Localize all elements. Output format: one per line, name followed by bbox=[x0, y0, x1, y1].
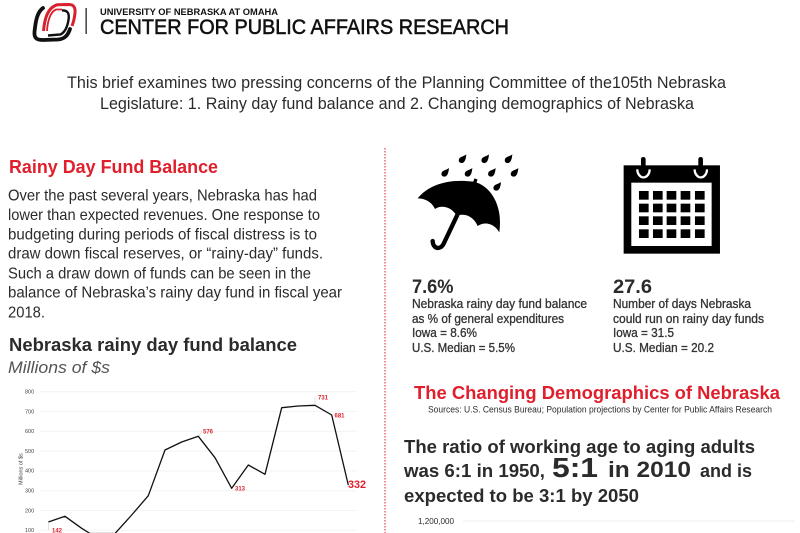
stat: days of funding: U.S. Median = 20.2 bbox=[613, 341, 714, 355]
body paragraph: draw down fiscal reserves, or “rainy-day” funds. bbox=[8, 246, 323, 263]
icon: calendar bbox=[624, 159, 720, 254]
stat: days of funding: Number of days Nebraska bbox=[613, 297, 751, 311]
center divider bbox=[384, 148, 386, 533]
line chart: rainy day fund balance: 500 bbox=[25, 449, 34, 455]
line chart: rainy day fund balance: 300 bbox=[25, 488, 34, 494]
line chart: rainy day fund balance: 600 bbox=[25, 429, 34, 435]
unit name: UNIVERSITY OF NEBRASKA AT OMAHA bbox=[100, 7, 279, 17]
line chart: rainy day fund balance: 681 bbox=[334, 414, 345, 420]
header bbox=[34, 4, 509, 40]
chart subtitle: Millions of $s bbox=[8, 358, 111, 377]
line chart: rainy day fund balance: 332 bbox=[348, 479, 366, 491]
line chart: rainy day fund balance: 700 bbox=[25, 409, 34, 415]
ratio statement: was 6:1 in 1950, bbox=[403, 461, 545, 481]
line chart: rainy day fund balance: 800 bbox=[25, 390, 34, 396]
body paragraph: Over the past several years, Nebraska has had bbox=[8, 188, 317, 205]
stat: fund balance percentage: Iowa = 8.6% bbox=[412, 326, 477, 340]
icon: university O logo bbox=[34, 4, 75, 40]
body paragraph bbox=[8, 188, 343, 321]
stat: days of funding: Iowa = 31.5 bbox=[613, 326, 674, 340]
stat: days of funding: could run on rainy day funds bbox=[613, 312, 764, 326]
ratio statement: 5:1 bbox=[552, 452, 598, 483]
line chart: rainy day fund balance: 576 bbox=[203, 430, 214, 436]
ratio statement bbox=[403, 437, 755, 506]
body paragraph: lower than expected revenues. One response to bbox=[8, 207, 320, 224]
stat: fund balance percentage: Nebraska rainy day fund balance bbox=[412, 297, 587, 311]
stat: fund balance percentage: as % of general expenditures bbox=[412, 312, 564, 326]
intro text: Legislature: 1. Rainy day fund balance and 2. Changing demographics of Nebraska bbox=[100, 95, 695, 113]
panel: changing demographics bbox=[403, 382, 795, 526]
heading: The Changing Demographics of Nebraska bbox=[414, 382, 781, 403]
center name: CENTER FOR PUBLIC AFFAIRS RESEARCH bbox=[100, 16, 509, 39]
icon: umbrella with rain bbox=[418, 154, 518, 248]
intro text: This brief examines two pressing concerns of the Planning Committee of the105th Nebraska bbox=[67, 74, 727, 92]
panel: rainy day fund balance bbox=[8, 157, 366, 533]
ratio statement: in 2010 bbox=[608, 457, 691, 482]
stat: fund balance percentage: U.S. Median = 5.5% bbox=[412, 341, 515, 355]
line chart: rainy day fund balance: 400 bbox=[25, 469, 34, 475]
line chart: rainy day fund balance: Millions of $s bbox=[18, 453, 24, 485]
chart heading: Nebraska rainy day fund balance bbox=[9, 335, 297, 355]
body paragraph: budgeting during periods of fiscal distress is to bbox=[8, 226, 317, 244]
body paragraph: 2018. bbox=[8, 304, 45, 321]
line chart: rainy day fund balance: 313 bbox=[235, 486, 246, 492]
ratio statement: expected to be 3:1 by 2050 bbox=[404, 486, 639, 506]
header divider bbox=[86, 8, 87, 34]
line chart: rainy day fund balance bbox=[18, 390, 366, 533]
stat: fund balance percentage bbox=[412, 277, 587, 355]
ratio statement: The ratio of working age to aging adults bbox=[404, 437, 755, 457]
body paragraph: balance of Nebraska’s rainy day fund in fiscal year bbox=[8, 285, 343, 302]
intro text bbox=[67, 74, 727, 113]
line chart: rainy day fund balance: 731 bbox=[318, 396, 329, 402]
ratio statement: and is bbox=[700, 461, 752, 481]
stat: fund balance percentage: 7.6% bbox=[412, 277, 454, 298]
stat: days of funding: 27.6 bbox=[613, 277, 652, 298]
body paragraph: Such a draw down of funds can be seen in the bbox=[8, 265, 311, 282]
heading: Rainy Day Fund Balance bbox=[9, 157, 218, 177]
stat: days of funding bbox=[613, 277, 764, 355]
line chart: rainy day fund balance: 200 bbox=[25, 508, 34, 514]
demographic chart axis: 1,200,000 bbox=[418, 517, 455, 526]
